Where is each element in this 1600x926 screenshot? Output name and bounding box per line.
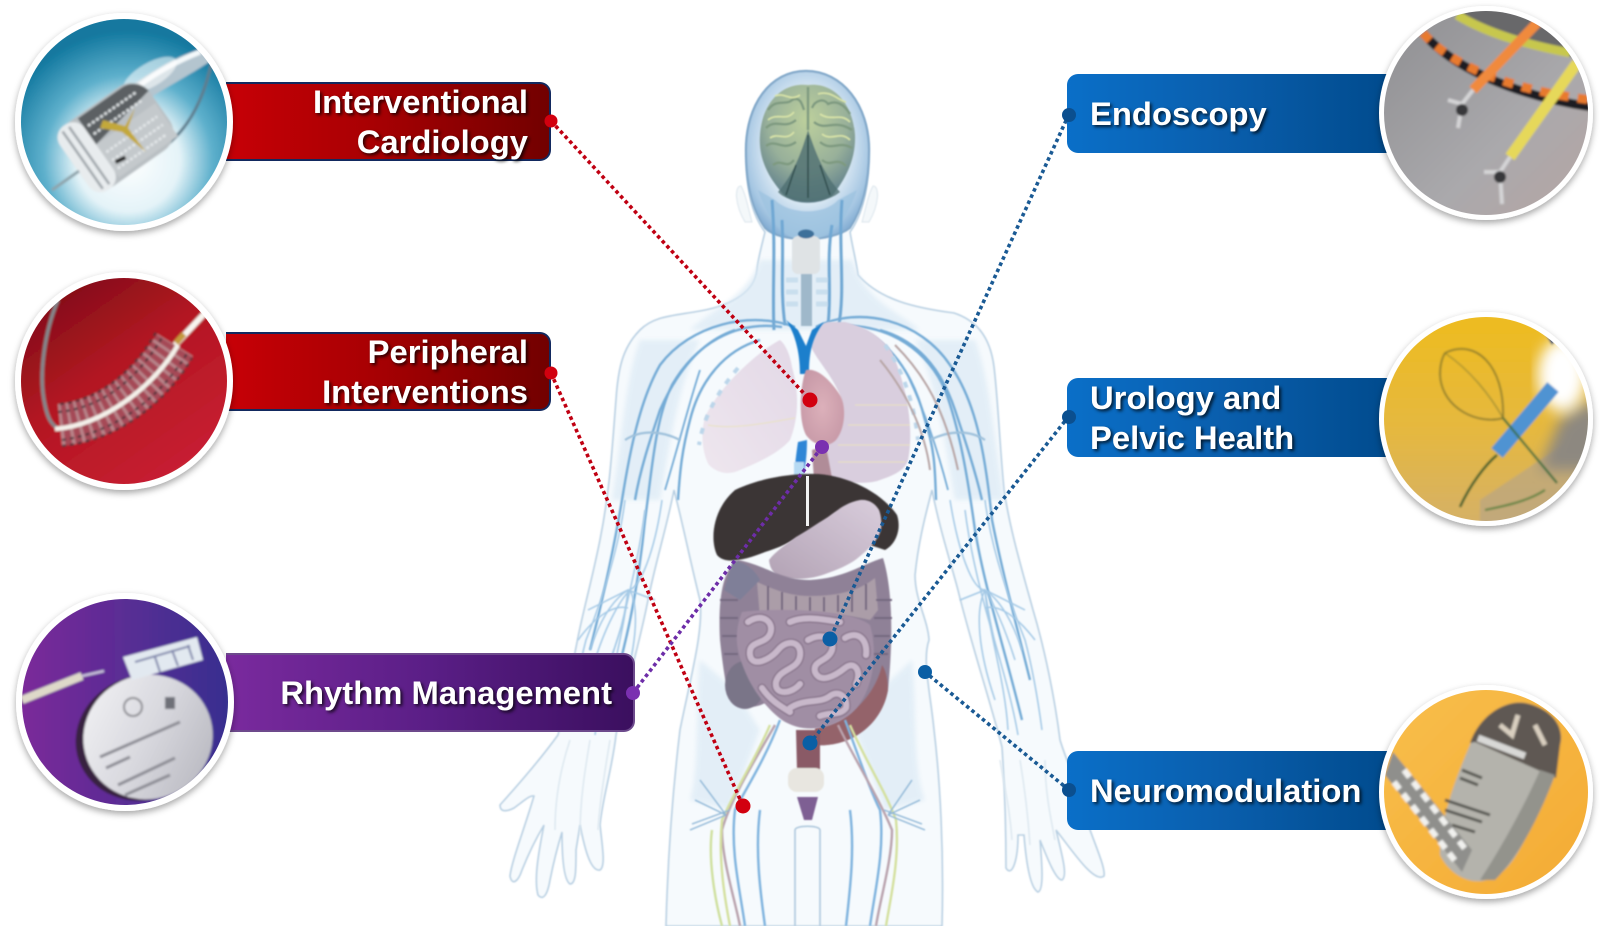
label: Endoscopy: Endoscopy <box>1090 95 1267 132</box>
label: Interventional Cardiology <box>226 82 551 161</box>
falciform ligament <box>806 476 809 526</box>
label: Peripheral Interventions <box>226 332 551 411</box>
label: Urology and Pelvic Health: Pelvic Health <box>1090 418 1294 456</box>
large intestine <box>720 558 892 745</box>
photo: neuromodulation stimulator <box>1377 683 1597 903</box>
head <box>736 71 878 240</box>
ribs <box>699 345 918 445</box>
connector: Interventional Cardiology to heart <box>544 114 818 408</box>
label: Urology and Pelvic Health <box>1067 378 1397 457</box>
connector: Peripheral Interventions to femoral artery <box>544 366 750 814</box>
label: Urology and Pelvic Health: Urology and <box>1090 379 1281 416</box>
label: Endoscopy <box>1067 74 1397 153</box>
photo: endoscopy forceps <box>1377 4 1600 224</box>
neck: trachea and spine <box>772 200 842 330</box>
label: Interventional Cardiology: Cardiology <box>357 122 528 160</box>
label: Rhythm Management: Rhythm Management <box>280 674 612 711</box>
body silhouette <box>500 71 1104 926</box>
hands <box>555 740 1055 845</box>
connector: Urology to pelvis <box>802 410 1076 750</box>
connector: Rhythm Management to heart <box>626 440 829 700</box>
stomach <box>769 500 881 579</box>
lungs <box>702 322 910 483</box>
photo: pacemaker <box>16 593 236 820</box>
soft chest and arm shading <box>612 260 1004 810</box>
rectum and pelvic organs <box>788 730 824 820</box>
small intestine <box>737 610 874 729</box>
heart <box>801 370 844 445</box>
connector: Neuromodulation to spine <box>918 665 1076 797</box>
label: Neuromodulation <box>1067 751 1397 830</box>
label: Neuromodulation: Neuromodulation <box>1090 772 1361 809</box>
great vessels <box>786 320 832 480</box>
nerves and leg vessels <box>690 720 925 926</box>
upper arm vessel accents <box>880 345 958 470</box>
photo: heart valve <box>15 13 235 235</box>
label: Interventional Cardiology: Interventional <box>313 83 528 120</box>
label: Peripheral Interventions: Peripheral <box>368 333 528 370</box>
forearm vessels <box>570 432 1042 735</box>
connector: Endoscopy to intestine <box>822 108 1076 646</box>
brain <box>760 85 855 203</box>
collar and arm vessels <box>590 317 1030 720</box>
liver <box>713 474 899 561</box>
photo: peripheral stent <box>15 272 235 492</box>
label: Peripheral Interventions: Interventions <box>322 372 528 410</box>
photo: urology basket <box>1377 310 1600 530</box>
label: Rhythm Management <box>226 653 635 732</box>
